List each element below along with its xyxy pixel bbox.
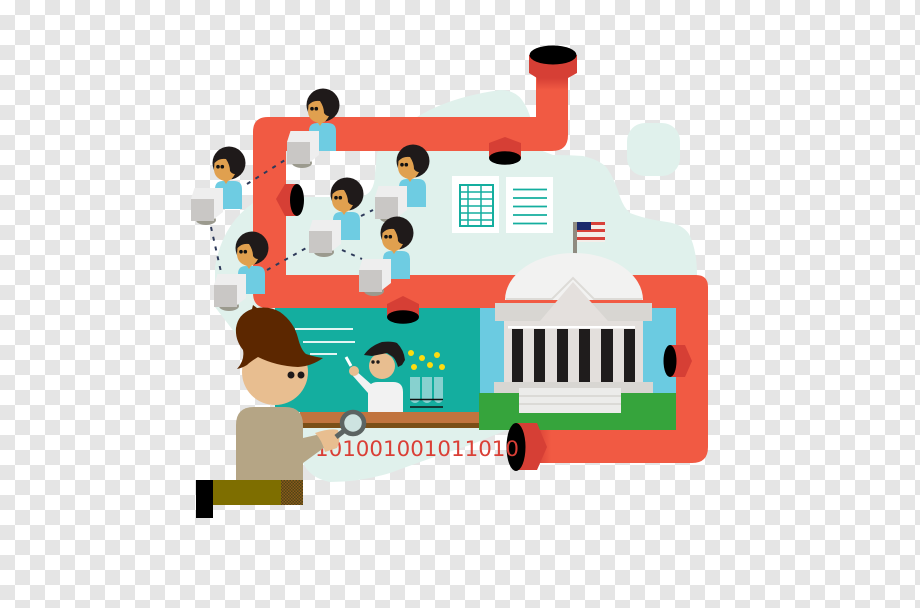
computer 5 xyxy=(359,259,391,296)
computer 3 xyxy=(309,220,341,257)
flag xyxy=(573,222,605,257)
mint rounded blob xyxy=(627,123,680,176)
computer 2 xyxy=(191,188,223,225)
mint background blob xyxy=(215,90,697,482)
panel: teal classroom xyxy=(275,308,480,412)
valve: lower pipe xyxy=(387,296,419,324)
teacher xyxy=(346,342,405,412)
test tubes xyxy=(410,377,443,407)
valve: right pipe xyxy=(664,345,692,377)
computer 4 xyxy=(375,186,407,223)
person 2 xyxy=(212,146,246,209)
person 6 xyxy=(236,232,268,294)
document: text page xyxy=(506,177,553,233)
binary text: 101001001011010 xyxy=(315,437,519,462)
red pipe xyxy=(253,75,708,463)
person 1 xyxy=(306,88,340,151)
network links xyxy=(211,160,373,272)
woman with magnifier xyxy=(236,305,364,480)
chalkboard lines xyxy=(295,329,355,354)
valve: top pipe xyxy=(489,137,521,165)
computer 6 xyxy=(214,274,246,311)
pipe funnel top xyxy=(529,46,577,90)
desk xyxy=(300,412,479,428)
person 5 xyxy=(380,216,414,279)
corrupted base block xyxy=(196,480,303,518)
yellow molecules xyxy=(408,350,445,370)
valve: left pipe xyxy=(276,184,304,216)
panel: lawn xyxy=(479,393,676,430)
building: capitol xyxy=(494,253,653,413)
valve: bottom pipe xyxy=(506,423,551,471)
person 3 xyxy=(330,178,364,240)
panel: sky behind building xyxy=(480,308,676,394)
computer 1 xyxy=(287,131,319,168)
person 4 xyxy=(396,144,430,207)
document: spreadsheet xyxy=(452,176,499,233)
